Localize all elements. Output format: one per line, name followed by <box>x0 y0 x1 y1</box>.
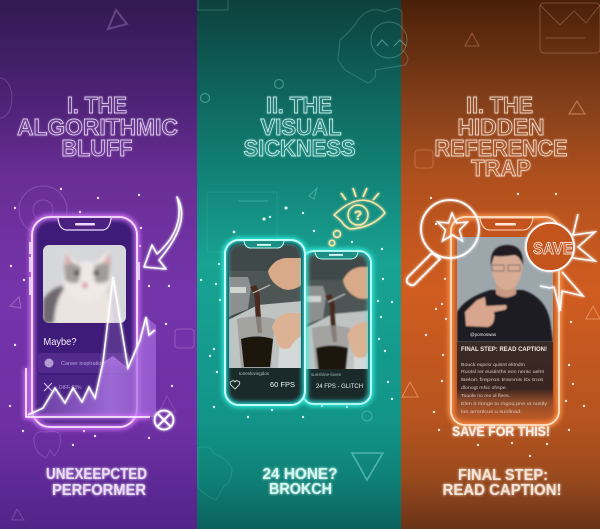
caption: Maybe?: Maybe? <box>44 336 77 348</box>
row: diff: DIFF 63% <box>59 385 82 391</box>
bottom caption: final step read caption: READ CAPTION! <box>442 482 562 499</box>
icon: eye with question mark <box>329 188 385 246</box>
bottom caption: unexeepcted performer: PERFORMER <box>52 482 146 499</box>
title: II. The Visual Sickness: II. THE <box>266 92 332 118</box>
phone: teal right 24 fps <box>302 251 378 404</box>
row: diff <box>38 375 130 411</box>
row: career inspiration: Career inspiration <box>61 361 104 367</box>
label: save for this: SAVE FOR THIS! <box>452 424 550 439</box>
caption heading: FINAL STEP: READ CAPTION! <box>461 346 547 353</box>
phone: orange panel <box>451 217 559 425</box>
icon: crossed circle <box>154 410 174 430</box>
phone: teal left 60 fps <box>225 240 305 405</box>
panel: teal background <box>197 0 402 529</box>
cat photo <box>43 245 126 323</box>
photo: presenter <box>457 237 553 342</box>
caption body: Elen it rlonge to rngoq pne ut nustly <box>461 401 548 406</box>
icon: heart <box>230 381 240 389</box>
label: 24 FPS glitch: 24 FPS - GLITCH <box>316 383 363 390</box>
label: handle: sunshine-loves <box>311 372 342 377</box>
label: handle: toneslovingdos <box>239 371 270 376</box>
title: I. The Algorithmic Bluff: ALGORITHMIC <box>17 114 178 140</box>
arrow: curved white <box>144 197 182 269</box>
bottom caption: 24 hone brokch: 24 HONE? <box>262 466 338 483</box>
icon: save badge <box>526 214 595 311</box>
title: II. The Hidden Reference Trap: II. THE <box>466 92 533 118</box>
bottom caption: 24 hone brokch <box>262 466 338 498</box>
bottom caption: 24 hone brokch: BROKCH <box>269 481 332 498</box>
photo: presenter: @pomoswas <box>470 332 497 337</box>
chart: spike line with area <box>26 277 156 417</box>
caption body: Ruotsl rer eustinths eon nerac uelnt <box>461 369 545 374</box>
caption body: Belon frepros tnsnnis itx tnot <box>461 377 544 382</box>
panel: orange background <box>401 0 600 529</box>
title: I. The Algorithmic Bluff <box>17 92 178 161</box>
title: I. The Algorithmic Bluff: BLUFF <box>62 135 132 161</box>
title: II. The Hidden Reference Trap: HIDDEN <box>458 114 544 140</box>
title: II. The Hidden Reference Trap: TRAP <box>471 155 531 181</box>
bottom caption: final step read caption <box>442 467 562 499</box>
title: II. The Visual Sickness: SICKNESS <box>244 135 356 161</box>
panel: purple background <box>0 0 197 529</box>
phone: purple panel <box>30 217 139 427</box>
caption body: dlonogt mhic ohspe. <box>461 385 507 390</box>
icon: save badge: SAVE <box>533 239 573 258</box>
bottom caption: unexeepcted performer: UNEXEEPCTED <box>46 466 147 483</box>
bottom caption: final step read caption: FINAL STEP: <box>458 467 548 484</box>
title: I. The Algorithmic Bluff: I. THE <box>67 92 127 118</box>
bottom caption: unexeepcted performer <box>46 466 147 499</box>
caption body: Touole no rex ol flees. <box>461 393 510 398</box>
caption body: lon arrsnlcus u sunlinad. <box>461 409 522 414</box>
caption panel <box>457 342 553 420</box>
row: career inspiration <box>38 353 130 373</box>
icon: magnifier with star <box>407 200 479 285</box>
title: II. The Hidden Reference Trap <box>434 92 568 181</box>
title: II. The Visual Sickness: VISUAL <box>260 114 342 140</box>
caption body: Bouck eqorsr quisnt elitndm <box>461 362 525 367</box>
caption body <box>461 362 548 414</box>
title: II. The Visual Sickness <box>244 92 356 161</box>
particle dots <box>9 188 585 457</box>
icon: eye with question mark: ? <box>354 207 362 223</box>
label: 60 FPS: 60 FPS <box>270 380 295 389</box>
title: II. The Hidden Reference Trap: REFERENCE <box>434 135 568 161</box>
